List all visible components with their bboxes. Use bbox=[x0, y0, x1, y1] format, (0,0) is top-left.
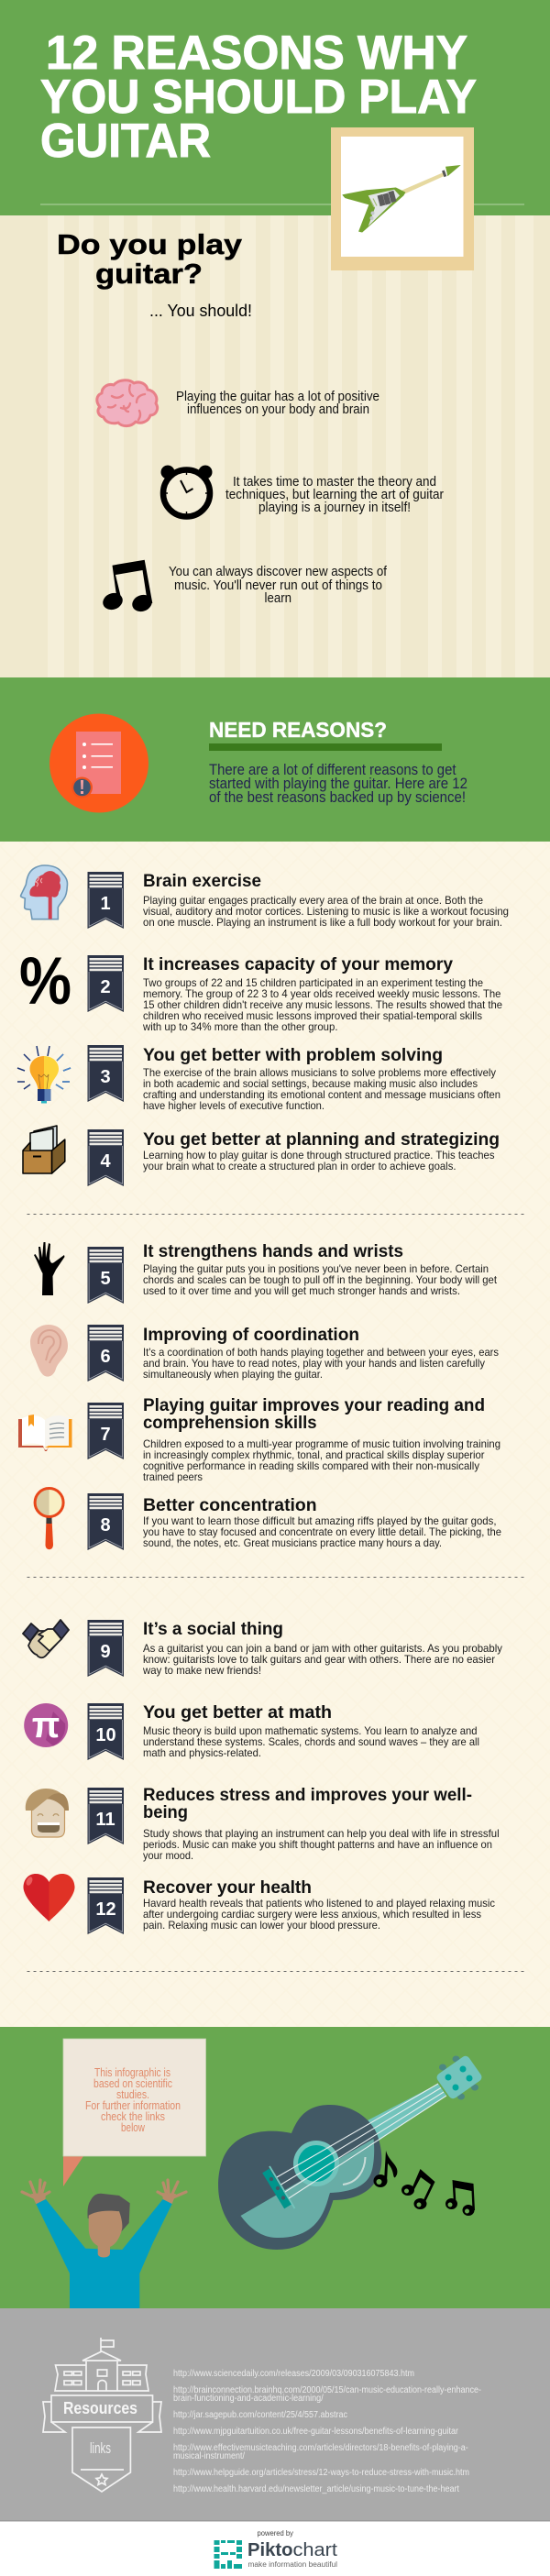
heading: memory: It increases capacity of your memory bbox=[143, 955, 453, 974]
reason 4 bbox=[23, 1126, 500, 1186]
heading: math: You get better at math bbox=[143, 1703, 332, 1723]
ribbon 12: 12 bbox=[95, 1899, 116, 1920]
ribbon 7: 7 bbox=[100, 1425, 111, 1445]
ribbon 9: 9 bbox=[100, 1642, 111, 1662]
text: memory: 15 other children didn't receive any music lessons. The results showed that the bbox=[143, 998, 502, 1011]
ribbon 2: 2 bbox=[100, 977, 111, 997]
reason 12 bbox=[23, 1874, 495, 1934]
heading: reading bbox=[143, 1396, 485, 1433]
text: journey: techniques, but learning the art of guitar bbox=[226, 488, 444, 502]
text: brain exercise: visual, auditory and motor cortices. Listening to music is like a workout focusing bbox=[143, 905, 509, 918]
text: stress: Study shows that playing an instrument can help you deal with life in stressful bbox=[143, 1827, 500, 1840]
text: speech bubble: check the links bbox=[101, 2109, 165, 2123]
text: speech bubble: studies. bbox=[116, 2087, 149, 2101]
text: reading bbox=[143, 1437, 500, 1483]
text: reading: trained peers bbox=[143, 1470, 203, 1483]
ribbon 11 bbox=[88, 1788, 124, 1844]
ribbon 12 bbox=[88, 1877, 124, 1934]
heading: reading: comprehension skills bbox=[143, 1414, 317, 1433]
ribbon 2 bbox=[88, 955, 124, 1012]
text: planning bbox=[143, 1149, 495, 1172]
text: reading: Children exposed to a multi-year programme of music tuition involving training bbox=[143, 1437, 500, 1450]
icon: music note bbox=[101, 560, 154, 614]
reason 2 bbox=[19, 944, 502, 1033]
heading: need reasons: NEED REASONS? bbox=[209, 718, 387, 742]
heading: stress: Reduces stress and improves your well- bbox=[143, 1786, 472, 1805]
text: memory: with up to 34% more than the other group. bbox=[142, 1020, 337, 1033]
text: concentration: you have to stay focused and concentrate on every little detail. The picking, the bbox=[143, 1525, 501, 1538]
text: planning: your brain what to create a structured plan in order to achieve goals. bbox=[143, 1160, 456, 1172]
ribbon 7 bbox=[88, 1403, 124, 1459]
text: concentration bbox=[143, 1514, 501, 1549]
title: 12 REASONS WHY bbox=[46, 27, 468, 80]
text: memory: memory. The group of 22 3 to 4 year olds received weekly music lessons. The bbox=[143, 987, 501, 1000]
text: coordination: It's a coordination of both hands playing together and between your eyes, ears bbox=[143, 1346, 499, 1359]
text: memory: children who received music lessons improved their spatial-temporal skills bbox=[143, 1009, 482, 1022]
text: speech bubble bbox=[85, 2065, 181, 2134]
text: social: way to make new friends! bbox=[142, 1664, 261, 1677]
ribbon 8 bbox=[88, 1493, 124, 1550]
text: source links: http://www.helpguide.org/articles/stress/12-ways-to-reduce-stress-with-music.htm bbox=[173, 2468, 469, 2478]
icon: flying v guitar bbox=[343, 165, 461, 232]
ribbon 5 bbox=[88, 1247, 124, 1304]
text: source links: http://www.sciencedaily.com/releases/2009/03/090316075843.htm bbox=[173, 2369, 414, 2379]
text: planning: Learning how to play guitar is done through structured practice. This teaches bbox=[143, 1149, 495, 1161]
ribbon 5: 5 bbox=[100, 1269, 111, 1289]
person with raised arms bbox=[22, 2180, 186, 2308]
text: positive influences: Playing the guitar has a lot of positive bbox=[176, 390, 380, 404]
reason 8 bbox=[35, 1489, 501, 1550]
heading: reading: Playing guitar improves your reading and bbox=[143, 1396, 485, 1415]
icon: hand bbox=[34, 1242, 64, 1295]
heading: stress bbox=[143, 1786, 472, 1822]
heading: planning: You get better at planning and strategizing bbox=[143, 1130, 500, 1150]
text: reasons intro bbox=[209, 761, 468, 806]
speech bubble bbox=[63, 2039, 205, 2186]
text: concentration: If you want to learn those difficult but amazing riffs played by the guitar gods, bbox=[143, 1514, 497, 1527]
heading: social: It’s a social thing bbox=[143, 1620, 283, 1639]
text: links: links bbox=[90, 2439, 111, 2457]
text: brain exercise: Playing guitar engages practically every area of the brain at once. Both the bbox=[143, 894, 483, 907]
text: hands: used to it over time and you will get much stronger hands and wrists. bbox=[143, 1284, 460, 1297]
panel: header bbox=[0, 0, 550, 215]
ribbon 8: 8 bbox=[100, 1515, 111, 1536]
text: source links bbox=[173, 2369, 481, 2494]
text: coordination bbox=[143, 1346, 499, 1381]
text: stress bbox=[143, 1827, 500, 1862]
logo: piktochart: Pikto bbox=[248, 2540, 293, 2560]
ribbon 4 bbox=[88, 1129, 124, 1186]
panel: reasons bbox=[0, 842, 550, 2027]
icon: light bulb bbox=[17, 1046, 71, 1104]
text: brain exercise bbox=[143, 894, 509, 929]
heading: concentration: Better concentration bbox=[143, 1496, 317, 1515]
text: journey: playing is a journey in itself! bbox=[258, 501, 411, 515]
ribbon 10: 10 bbox=[95, 1725, 116, 1745]
text: hands: chords and scales can be tough to pull off in the beginning. Your body will get bbox=[143, 1273, 498, 1286]
text: speech bubble: For further information bbox=[85, 2098, 181, 2112]
icon: laughing face bbox=[26, 1789, 69, 1837]
text: reading: in increasingly complex rhythmic, tonal, and practical skills display superior bbox=[143, 1448, 485, 1461]
heading: do you play guitar: Do you play bbox=[57, 228, 243, 260]
text: source links: musical-instrument/ bbox=[173, 2451, 245, 2461]
panel: intro bbox=[0, 215, 550, 677]
ribbon 6 bbox=[88, 1325, 124, 1382]
text: problem solving: in both academic and social settings, because making music also includes bbox=[143, 1077, 478, 1090]
text: journey: It takes time to master the theory and bbox=[233, 475, 436, 490]
text: coordination: simultaneously when playing the guitar. bbox=[143, 1368, 323, 1381]
text: source links: http://jar.sagepub.com/content/25/4/557.abstrac bbox=[173, 2410, 347, 2420]
text: health bbox=[143, 1897, 495, 1932]
icon: checklist alert bbox=[50, 713, 148, 812]
panel: need reasons bbox=[0, 677, 550, 842]
reason 6 bbox=[30, 1325, 499, 1382]
acoustic guitar bbox=[218, 2054, 483, 2250]
text: speech bubble: This infographic is bbox=[94, 2065, 170, 2079]
ribbon 4: 4 bbox=[100, 1151, 111, 1172]
logo: piktochart bbox=[214, 2540, 337, 2569]
text: coordination: and brain. You have to read notes, play with your hands and listen carefully bbox=[143, 1357, 485, 1370]
reason 7 bbox=[18, 1396, 500, 1483]
icon: heart bbox=[23, 1874, 75, 1921]
title bbox=[40, 27, 477, 168]
heading: do you play guitar bbox=[57, 228, 243, 290]
icon: pi bbox=[24, 1703, 68, 1747]
text: discover bbox=[169, 565, 388, 606]
music notes bbox=[374, 2151, 475, 2216]
reason 1 bbox=[21, 865, 509, 929]
text: problem solving: The exercise of the brain allows musicians to solve problems more effectively bbox=[143, 1066, 496, 1079]
text: stress: periods. Music can make you shift thought patterns and have an influence on bbox=[143, 1838, 492, 1851]
text: source links: http://www.mjpguitartuition.co.uk/free-guitar-lessons/benefits-of-learning-guitar bbox=[173, 2427, 459, 2437]
ribbon 11: 11 bbox=[95, 1810, 116, 1830]
text: math: Music theory is build upon mathematic systems. You learn to analyze and bbox=[143, 1724, 477, 1737]
text: problem solving: crafting and understanding its emotional content and message musicians often bbox=[143, 1088, 500, 1101]
title: YOU SHOULD PLAY bbox=[40, 71, 477, 124]
text: hands: Playing the guitar puts you in positions you've never been in before. Certain bbox=[143, 1262, 489, 1275]
icon: handshake bbox=[23, 1620, 69, 1657]
heading: hands: It strengthens hands and wrists bbox=[143, 1242, 403, 1261]
text: hands bbox=[143, 1262, 498, 1297]
text: source links: brain-functioning-and-academic-learning/ bbox=[173, 2394, 324, 2404]
guitar picture frame bbox=[331, 127, 474, 270]
ribbon 10 bbox=[88, 1703, 124, 1760]
text: source links: http://www.effectivemusicteaching.com/articles/directors/18-benefits-of-playing-a- bbox=[173, 2443, 468, 2453]
text: social: know: guitarists love to talk guitars and gear with others. There are no easier bbox=[143, 1653, 495, 1666]
text: memory: Two groups of 22 and 15 children participated in an experiment testing the bbox=[143, 976, 483, 989]
text: reasons intro: There are a lot of different reasons to get bbox=[209, 761, 456, 778]
icon: pi: π bbox=[32, 1705, 60, 1745]
text: stress: your mood. bbox=[143, 1849, 193, 1862]
text: positive influences bbox=[176, 390, 380, 417]
text: resources: Resources bbox=[63, 2399, 138, 2417]
text: you should: ... You should! bbox=[149, 301, 252, 320]
ribbon 3 bbox=[88, 1045, 124, 1102]
icon: resources badge bbox=[43, 2338, 161, 2492]
text: brain exercise: on one muscle. Playing an instrument is like a full body workout for your brain. bbox=[143, 916, 502, 929]
text: memory bbox=[142, 976, 502, 1033]
text: math bbox=[143, 1724, 479, 1759]
text: discover: You can always discover new aspects of bbox=[169, 565, 388, 579]
reason 11 bbox=[26, 1786, 500, 1862]
text: social: As a guitarist you can join a band or jam with other guitarists. As you probably bbox=[143, 1642, 502, 1655]
logo: piktochart: make information beautiful bbox=[248, 2560, 337, 2569]
text: reasons intro: of the best reasons backed up by science! bbox=[209, 788, 466, 806]
text: health: Havard health reveals that patients who listened to and played relaxing music bbox=[143, 1897, 495, 1910]
panel: resources bbox=[0, 2308, 550, 2521]
ribbon 1: 1 bbox=[100, 894, 111, 914]
icon: brain bbox=[97, 380, 158, 426]
logo: piktochart: chart bbox=[293, 2540, 337, 2560]
reason 3 bbox=[17, 1045, 500, 1112]
text: discover: music. You'll never run out of things to bbox=[174, 578, 382, 593]
heading: do you play guitar: guitar? bbox=[95, 258, 203, 290]
icon: ear bbox=[30, 1325, 68, 1377]
text: math: math and physics-related. bbox=[143, 1746, 261, 1759]
text: speech bubble: based on scientific bbox=[94, 2076, 172, 2090]
icon: open book bbox=[18, 1415, 72, 1451]
text: positive influences: influences on your body and brain bbox=[187, 402, 369, 417]
heading: coordination: Improving of coordination bbox=[143, 1326, 359, 1345]
reason 5 bbox=[34, 1242, 498, 1304]
ribbon 1 bbox=[88, 872, 124, 929]
icon: magnifier bbox=[35, 1489, 63, 1549]
text: math: understand these systems. Scales, chords and sound waves – they are all bbox=[143, 1735, 479, 1748]
text: problem solving: have higher levels of executive function. bbox=[143, 1099, 324, 1112]
ribbon 6: 6 bbox=[100, 1347, 111, 1367]
text: powered by: powered by bbox=[257, 2529, 293, 2537]
text: social bbox=[142, 1642, 502, 1677]
text: concentration: sound, the notes, etc. Great musicians practice many hours a day. bbox=[143, 1536, 442, 1549]
text: source links: http://www.health.harvard.edu/newsletter_article/using-music-to-tune-the-heart bbox=[173, 2484, 459, 2494]
heading: brain exercise: Brain exercise bbox=[143, 872, 261, 891]
icon: head with brain bbox=[21, 865, 68, 919]
ribbon 3: 3 bbox=[100, 1067, 111, 1087]
heading: problem solving: You get better with problem solving bbox=[143, 1046, 443, 1065]
text: reading: cognitive performance in reading skills compared with their non-musically bbox=[143, 1459, 479, 1472]
text: problem solving bbox=[143, 1066, 500, 1112]
text: reasons intro: started with playing the guitar. Here are 12 bbox=[209, 775, 468, 792]
text: journey bbox=[226, 475, 444, 515]
heading: health: Recover your health bbox=[143, 1878, 312, 1898]
text: health: after undergoing cardiac surgery were less anxious, which resulted in less bbox=[143, 1908, 481, 1921]
text: discover: learn bbox=[264, 591, 292, 606]
text: health: pain. Relaxing music can lower your blood pressure. bbox=[143, 1919, 380, 1932]
text: source links: http://brainconnection.brainhq.com/2000/05/15/can-music-education-really-enhance- bbox=[173, 2385, 481, 2395]
reason 10 bbox=[24, 1703, 479, 1760]
icon: percent: % bbox=[19, 944, 72, 1018]
heading: stress: being bbox=[143, 1803, 188, 1822]
ribbon 9 bbox=[88, 1620, 124, 1677]
panel: closing illustration bbox=[0, 2027, 550, 2308]
title: GUITAR bbox=[40, 115, 211, 168]
icon: file box bbox=[23, 1126, 65, 1173]
icon: clock bbox=[161, 466, 213, 517]
reason 9 bbox=[23, 1620, 502, 1677]
text: speech bubble: below bbox=[121, 2120, 145, 2134]
panel: footer bbox=[0, 2521, 550, 2576]
